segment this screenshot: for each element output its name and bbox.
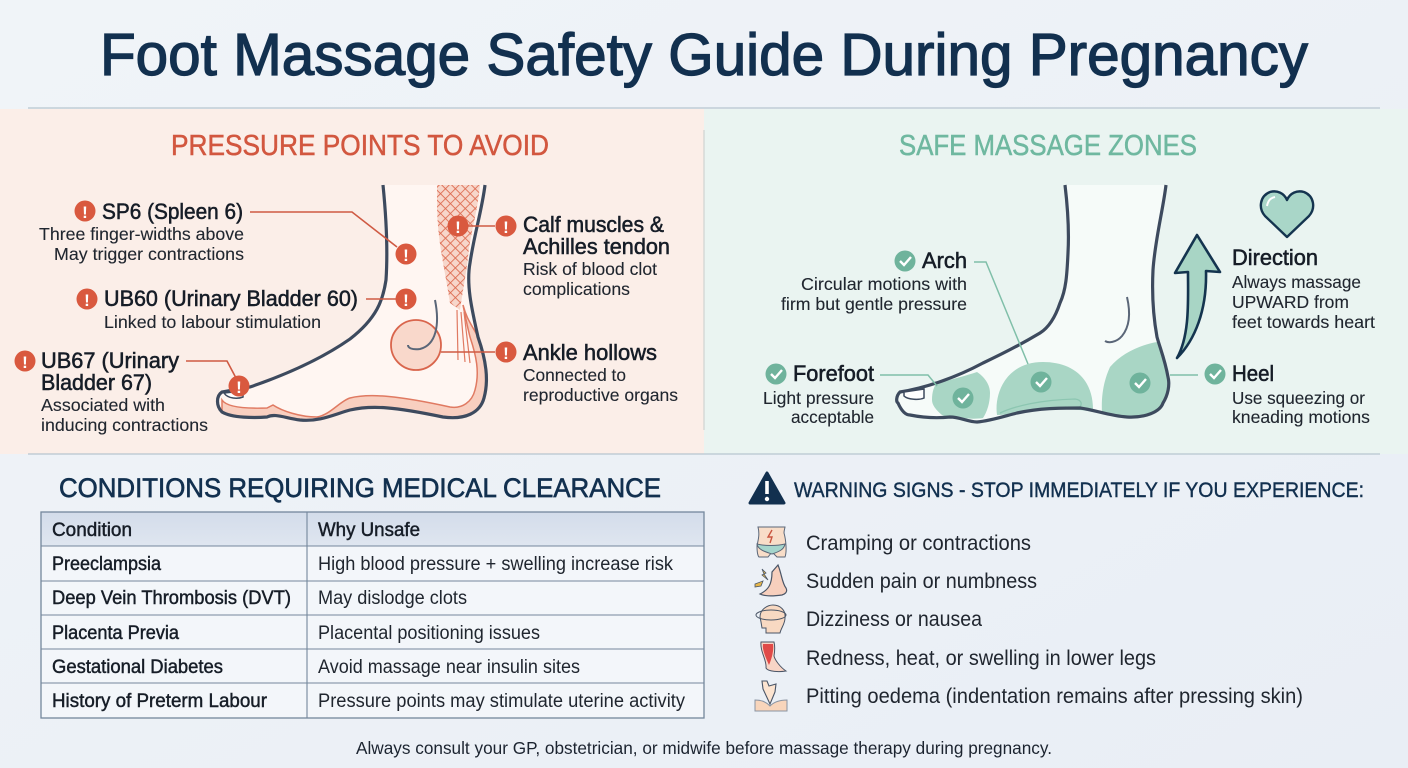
warning item: cramping <box>757 527 1031 557</box>
row: preeclampsia: Preeclampsia <box>52 554 161 575</box>
row: placenta previa <box>52 623 540 644</box>
check: forefoot zone <box>952 388 974 408</box>
heading: warning signs: WARNING SIGNS - STOP IMMEDIATELY IF YOU EXPERIENCE: <box>794 478 1364 502</box>
marker: SP6 on foot: ! <box>403 246 409 265</box>
row: DVT <box>52 588 467 609</box>
warning item: sudden pain <box>755 565 1037 596</box>
table: conditions <box>41 512 704 718</box>
label: ankle hollows: Ankle hollows <box>523 340 657 365</box>
label: forefoot: acceptable <box>791 407 874 427</box>
warning item: sudden pain: Sudden pain or numbness <box>806 569 1037 593</box>
warning item: redness <box>761 642 1156 672</box>
label: ankle hollows <box>496 340 678 405</box>
panel: pressure points to avoid <box>0 109 704 454</box>
warning item: redness: Redness, heat, or swelling in lower legs <box>806 646 1156 670</box>
label: ankle hollows: ! <box>503 344 509 363</box>
label: UB67: Bladder 67) <box>41 370 152 395</box>
row: preeclampsia: High blood pressure + swelling increase risk <box>318 554 673 575</box>
label: ankle hollows: reproductive organs <box>523 385 678 405</box>
row: gestational diabetes: Gestational Diabetes <box>52 657 223 678</box>
label: direction <box>1232 245 1375 332</box>
label: calf muscles: Achilles tendon <box>523 234 670 259</box>
row: placenta previa: Placental positioning issues <box>318 623 540 644</box>
label: heel: Use squeezing or <box>1232 388 1365 408</box>
title: Foot Massage Safety Guide During Pregnancy <box>100 22 1308 88</box>
warning item: cramping: Cramping or contractions <box>806 531 1031 555</box>
foot diagram: points to avoid <box>218 185 486 420</box>
label: calf muscles: Risk of blood clot <box>523 259 657 279</box>
row: header <box>52 520 420 541</box>
warning item: dizziness <box>756 605 982 633</box>
heading: pressure points: PRESSURE POINTS TO AVOID <box>171 130 549 162</box>
label: heel <box>1204 361 1370 427</box>
label: SP6: SP6 (Spleen 6) <box>102 199 243 224</box>
label: forefoot: Light pressure <box>763 388 874 408</box>
leader lines <box>880 262 1198 386</box>
warning item: pitting oedema <box>755 681 1303 711</box>
marker: UB67 on foot: ! <box>236 378 242 397</box>
row: header: Why Unsafe <box>318 520 420 541</box>
label: SP6 <box>39 199 244 264</box>
foot diagram: safe zones <box>897 185 1169 422</box>
icon: upward arrow <box>1175 235 1220 358</box>
row: header: Condition <box>52 520 132 541</box>
heading: safe zones: SAFE MASSAGE ZONES <box>899 130 1197 162</box>
marker: UB60 on foot: ! <box>403 291 409 310</box>
row: placenta previa: Placenta Previa <box>52 623 179 644</box>
row: DVT: May dislodge clots <box>318 588 467 609</box>
label: SP6: Three finger-widths above <box>39 224 244 244</box>
icon: heart <box>1261 191 1313 237</box>
label: calf muscles: ! <box>503 218 509 237</box>
row: preeclampsia <box>52 554 673 575</box>
check: heel zone <box>1130 372 1150 394</box>
label: SP6: ! <box>82 203 88 222</box>
leader lines <box>186 212 495 378</box>
label: direction: Always massage <box>1232 272 1361 292</box>
label: direction: UPWARD from <box>1232 292 1349 312</box>
label: ankle hollows: Connected to <box>523 365 626 385</box>
panel: safe massage zones <box>704 109 1408 454</box>
label: UB60: Linked to labour stimulation <box>104 312 321 332</box>
label: UB60: ! <box>84 291 90 310</box>
label: UB67 <box>14 348 208 435</box>
warning item: dizziness: Dizziness or nausea <box>806 607 982 631</box>
label: calf muscles: Calf muscles & <box>523 212 664 237</box>
label: UB67: inducing contractions <box>41 415 208 435</box>
label: UB67: Associated with <box>41 395 165 415</box>
label: arch: Circular motions with <box>801 274 967 294</box>
row: DVT: Deep Vein Thrombosis (DVT) <box>52 588 291 609</box>
marker: calf on foot: ! <box>455 218 461 237</box>
marker: UB60 on foot <box>396 288 416 310</box>
label: arch <box>781 248 967 314</box>
label: forefoot <box>763 361 874 427</box>
row: gestational diabetes <box>52 657 580 678</box>
label: direction: Direction <box>1232 245 1318 270</box>
label: UB67: UB67 (Urinary <box>41 348 179 373</box>
label: arch: firm but gentle pressure <box>781 294 967 314</box>
label: heel: Heel <box>1232 361 1274 386</box>
marker: UB67 on foot <box>228 376 250 397</box>
icon: warning triangle <box>750 473 784 503</box>
label: UB60 <box>76 286 358 332</box>
label: calf muscles <box>496 212 670 299</box>
label: SP6: May trigger contractions <box>54 244 244 264</box>
label: calf muscles: complications <box>523 279 630 299</box>
label: heel: kneading motions <box>1232 407 1370 427</box>
row: preterm labour: Pressure points may stimulate uterine activity <box>318 691 685 712</box>
label: forefoot: Forefoot <box>793 361 874 386</box>
label: arch: Arch <box>922 248 967 273</box>
check: arch zone <box>1030 372 1052 392</box>
row: preterm labour <box>52 691 685 712</box>
footer note: Always consult your GP, obstetrician, or midwife before massage therapy during pregnancy. <box>356 738 1052 758</box>
heading: conditions: CONDITIONS REQUIRING MEDICAL CLEARANCE <box>59 473 661 503</box>
label: direction: feet towards heart <box>1232 312 1375 332</box>
marker: SP6 on foot <box>396 244 416 265</box>
warning item: pitting oedema: Pitting oedema (indentation remains after pressing skin) <box>806 684 1303 708</box>
label: UB60: UB60 (Urinary Bladder 60) <box>104 286 358 311</box>
row: gestational diabetes: Avoid massage near insulin sites <box>318 657 580 678</box>
marker: calf on foot <box>448 216 468 237</box>
row: preterm labour: History of Preterm Labour <box>52 691 268 712</box>
label: UB67: ! <box>22 353 28 372</box>
